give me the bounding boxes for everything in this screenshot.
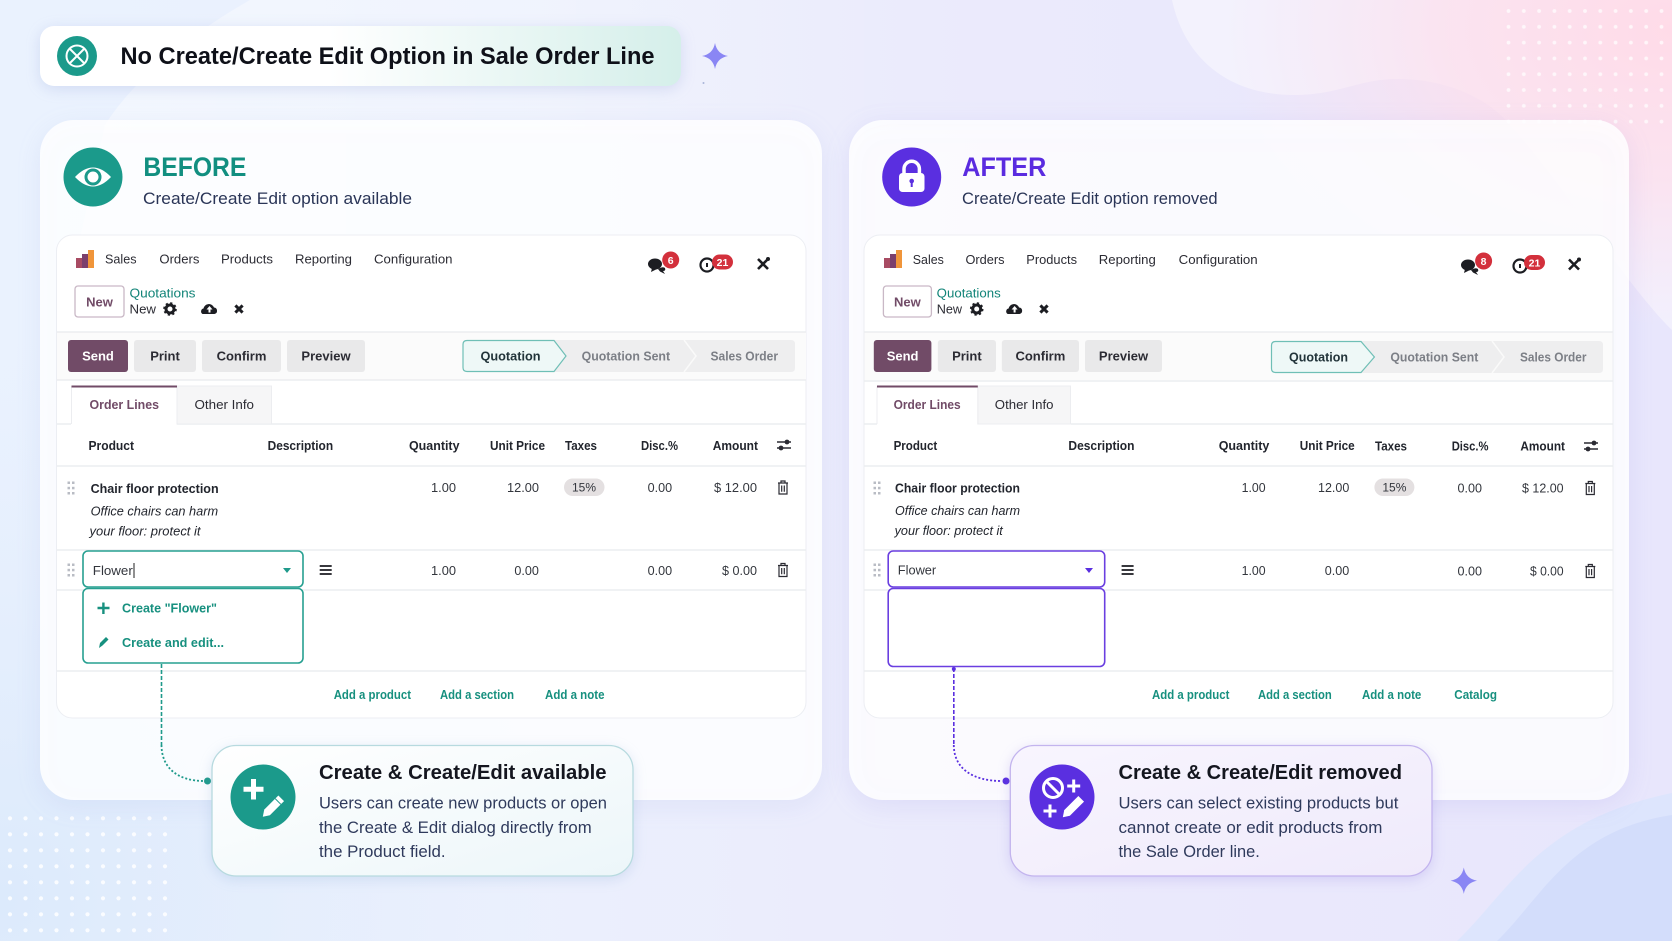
product input: [83, 551, 303, 587]
nav bar: Products: [221, 252, 273, 266]
table row: chair floor protection: your floor: protect it: [894, 524, 1003, 538]
tabs: [877, 386, 1070, 424]
action buttons: Confirm: [1015, 348, 1065, 364]
table row: flower: [874, 564, 1595, 578]
table header: Description: [268, 439, 333, 453]
table row: chair floor protection: 15%: [572, 480, 596, 494]
subheading: before: Create/Create Edit option available: [143, 189, 412, 208]
callout: create available: [212, 746, 633, 876]
nav bar: Sales: [105, 252, 137, 266]
table row: flower: 1.00: [1242, 564, 1266, 578]
subheading: after: Create/Create Edit option removed: [962, 189, 1218, 208]
table row: chair floor protection: Office chairs can harm: [91, 504, 218, 518]
breadcrumb: Quotations: [937, 286, 1001, 300]
table row: chair floor protection: 0.00: [648, 481, 672, 495]
action buttons: Send: [887, 348, 919, 364]
icon: crossed circle: [57, 36, 97, 76]
nav bar: 6: [668, 255, 674, 267]
breadcrumb: Quotations: [130, 286, 196, 300]
title text: No Create/Create Edit Option in Sale Order Line: [120, 43, 654, 70]
tabs: Order Lines: [90, 398, 159, 412]
breadcrumb: [883, 286, 1048, 317]
icon: lock: [882, 148, 941, 206]
nav bar: Reporting: [295, 252, 352, 266]
links: add lines: Add a product: [1152, 688, 1230, 702]
table row: chair floor protection: 12.00: [1318, 481, 1349, 495]
nav bar: Reporting: [1099, 252, 1156, 267]
tabs: Order Lines: [894, 398, 961, 412]
table row: chair floor protection: 0.00: [1458, 482, 1482, 496]
title banner: [40, 26, 681, 86]
table row: chair floor protection: [68, 478, 788, 538]
table header: Taxes: [1375, 440, 1407, 454]
table row: chair floor protection: Office chairs can harm: [895, 504, 1020, 518]
nav bar: 21: [717, 257, 728, 269]
table header: [894, 439, 1598, 454]
screenshot: before UI: [56, 235, 806, 718]
arrow: before connector: [162, 664, 211, 784]
nav bar: 21: [1529, 257, 1540, 269]
callout body: Users can create new products or open: [319, 794, 607, 812]
table header: Description: [1068, 439, 1134, 453]
status bar: Sales Order: [710, 350, 778, 364]
icon: sales logo: [76, 250, 94, 268]
product input: [888, 551, 1105, 587]
status bar: Sales Order: [1520, 350, 1587, 364]
nav bar: [884, 250, 1581, 275]
icon: eye: [64, 148, 122, 206]
nav bar: 8: [1481, 256, 1487, 268]
callout title: Create & Create/Edit removed: [1118, 762, 1402, 784]
icon: sparkle top: [702, 43, 728, 84]
nav bar: Orders: [159, 252, 200, 266]
table row: flower: [68, 564, 788, 578]
table row: chair floor protection: 12.00: [507, 481, 539, 495]
table header: Product: [88, 439, 135, 453]
callout body: the Product field.: [319, 843, 446, 861]
table header: Disc.%: [641, 439, 678, 453]
panel: before: [40, 120, 822, 800]
callout body: cannot create or edit products from: [1118, 819, 1382, 837]
table row: chair floor protection: Chair floor protection: [91, 482, 219, 496]
nav bar: Sales: [913, 252, 944, 267]
links: add lines: [334, 688, 605, 702]
table row: flower: 1.00: [431, 564, 456, 578]
links: add lines: Add a section: [440, 688, 514, 702]
action buttons: Print: [952, 348, 982, 364]
tabs: Other Info: [194, 398, 254, 412]
callout body: [319, 794, 607, 861]
table header: Taxes: [565, 439, 597, 453]
table header: Unit Price: [1300, 439, 1355, 453]
action buttons: Confirm: [217, 348, 266, 364]
heading: after: AFTER: [962, 152, 1046, 182]
nav bar: Products: [1026, 252, 1077, 267]
breadcrumb: New: [937, 302, 963, 316]
table row: flower: $ 0.00: [722, 564, 757, 578]
table header: Quantity: [1219, 439, 1269, 453]
product input: Flower: [93, 564, 133, 578]
table row: chair floor protection: [874, 478, 1595, 538]
table row: chair floor protection: $ 12.00: [714, 481, 757, 495]
status bar: Quotation Sent: [1390, 350, 1479, 364]
icon: sparkle bottom: [1451, 868, 1477, 894]
links: add lines: [1152, 688, 1497, 702]
icon: plus and pencil: [230, 764, 296, 830]
table row: flower: $ 0.00: [1530, 564, 1564, 578]
nav bar: [76, 250, 770, 274]
tabs: [72, 386, 272, 424]
table row: chair floor protection: $ 12.00: [1522, 482, 1564, 496]
table header: Product: [894, 439, 938, 453]
dropdown: create options: Create and edit...: [122, 636, 224, 650]
table row: flower: 0.00: [1325, 564, 1349, 578]
links: add lines: Add a note: [1362, 688, 1421, 702]
links: add lines: Add a note: [545, 688, 605, 702]
action buttons: Preview: [301, 348, 351, 364]
callout body: the Create & Edit dialog directly from: [319, 819, 592, 837]
breadcrumb: New: [86, 294, 114, 310]
status bar: Quotation Sent: [582, 350, 671, 364]
table row: chair floor protection: 1.00: [1242, 481, 1266, 495]
table header: Amount: [1520, 440, 1566, 454]
table row: flower: 0.00: [1458, 564, 1482, 578]
breadcrumb: New: [130, 302, 157, 316]
nav bar: Orders: [966, 252, 1005, 267]
table row: flower: 0.00: [514, 564, 539, 578]
table header: Disc.%: [1452, 440, 1488, 454]
nav bar: Configuration: [374, 252, 452, 266]
table row: chair floor protection: Chair floor protection: [895, 482, 1020, 496]
action buttons: Print: [150, 348, 180, 364]
table row: flower: 0.00: [648, 564, 672, 578]
links: add lines: Add a section: [1258, 688, 1332, 702]
table header: Quantity: [409, 439, 460, 453]
action buttons: Send: [82, 348, 114, 364]
dropdown: empty: [888, 588, 1105, 666]
heading: before: BEFORE: [143, 152, 246, 182]
action buttons: [874, 340, 1162, 372]
callout: create removed: [1010, 746, 1432, 876]
table header: Unit Price: [490, 439, 545, 453]
icon: banned plus and pencil: [1030, 764, 1094, 830]
callout body: the Sale Order line.: [1118, 843, 1260, 861]
callout body: [1118, 794, 1399, 861]
breadcrumb: New: [894, 294, 922, 310]
nav bar: Configuration: [1179, 252, 1258, 267]
icon: sales logo: [884, 250, 902, 268]
dropdown: create options: Create "Flower": [122, 602, 217, 616]
arrow: after connector: [952, 667, 1010, 784]
action buttons: [68, 340, 365, 372]
action buttons: Preview: [1099, 348, 1149, 364]
screenshot: after UI: [864, 235, 1613, 718]
links: add lines: Add a product: [334, 688, 412, 702]
table header: [88, 439, 791, 453]
table row: chair floor protection: your floor: protect it: [88, 524, 201, 538]
callout title: Create & Create/Edit available: [319, 762, 607, 784]
table row: chair floor protection: 15%: [1382, 480, 1407, 494]
table row: chair floor protection: 1.00: [431, 481, 456, 495]
callout body: Users can select existing products but: [1118, 794, 1399, 812]
tabs: Other Info: [995, 398, 1054, 412]
status bar: Quotation: [1289, 350, 1348, 364]
table header: Amount: [713, 439, 759, 453]
panel: after: [849, 120, 1629, 800]
product input: Flower: [898, 564, 936, 578]
dropdown: create options: [83, 588, 303, 663]
status bar: Quotation: [480, 350, 540, 364]
breadcrumb: [75, 286, 243, 317]
links: add lines: Catalog: [1454, 688, 1497, 702]
status bar: [1272, 341, 1603, 373]
status bar: [463, 340, 795, 372]
